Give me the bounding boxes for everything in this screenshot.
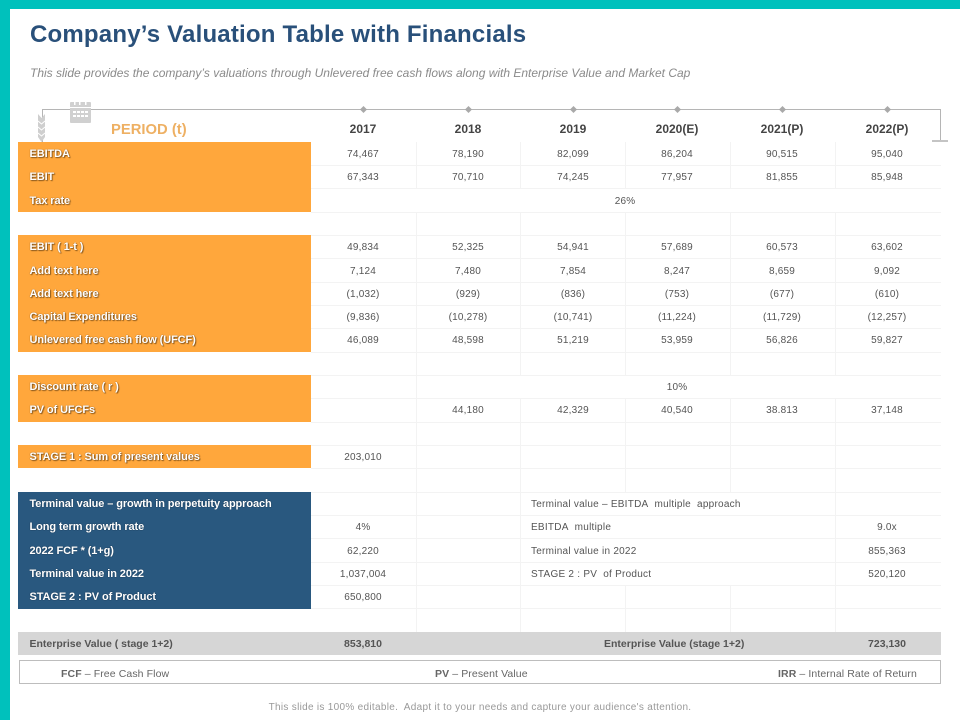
row: EBIT: 81,855: [766, 172, 798, 183]
period label: PERIOD (t): [111, 122, 187, 138]
row: PV of UFCFs: PV of UFCFs: [30, 404, 95, 416]
row: add text 2: [18, 282, 899, 305]
row: EBIT (1-t): 54,941: [557, 242, 589, 253]
year columns: 2022(P): [866, 122, 908, 136]
title: Company’s Valuation Table with Financials: [30, 21, 526, 48]
row: terminal value headings: Terminal value – EBITDA multiple approach: [531, 499, 741, 510]
row: PV of UFCFs: 37,148: [871, 405, 903, 416]
row: discount rate: Discount rate ( r ): [30, 381, 119, 393]
year columns: 2017: [350, 122, 376, 136]
row: discount rate: 10%: [667, 382, 687, 393]
row: long term growth rate: [18, 515, 897, 539]
legend: PV: PV – Present Value: [435, 668, 528, 680]
row: tax rate: 26%: [615, 196, 635, 207]
legend: IRR: IRR – Internal Rate of Return: [778, 668, 917, 680]
row: EBIT (1-t): 57,689: [661, 242, 693, 253]
row: add text 1: 7,480: [455, 266, 481, 276]
row: terminal value headings: Terminal value – growth in perpetuity approach: [30, 498, 272, 510]
row: stage 1: 203,010: [344, 452, 382, 463]
row: 2022 FCF: 2022 FCF * (1+g): [30, 545, 114, 557]
row: add text 1: 8,659: [769, 266, 795, 276]
row: PV of UFCFs: 38.813: [766, 405, 798, 416]
row: EBIT: 67,343: [347, 172, 379, 183]
row: terminal value in 2022: 520,120: [868, 569, 906, 580]
row: EBIT (1-t): EBIT ( 1-t ): [30, 241, 83, 253]
year columns: 2019: [560, 122, 586, 136]
row: long term growth rate: 9.0x: [877, 522, 897, 533]
row: EBITDA: 95,040: [871, 149, 903, 160]
row: add text 1: 7,124: [350, 266, 376, 276]
row: terminal value headings: [18, 492, 741, 515]
enterprise value label right: Enterprise Value (stage 1+2): [604, 638, 744, 650]
teal frame: left bar: [0, 0, 10, 720]
year columns: 2020(E): [656, 122, 698, 136]
row: capital expenditures: (11,729): [763, 312, 801, 323]
row: EBIT: [18, 165, 903, 189]
row: 2022 FCF: 855,363: [868, 546, 906, 557]
year columns: 2021(P): [761, 122, 803, 136]
row: PV of UFCFs: 42,329: [557, 405, 589, 416]
row: EBIT: EBIT: [30, 171, 54, 183]
row: PV of UFCFs: 40,540: [661, 405, 693, 416]
enterprise value left number: 853,810: [344, 638, 382, 650]
row: enterprise value band: [18, 632, 941, 655]
table header: period and years: [111, 122, 908, 138]
row: add text 2: (610): [875, 289, 899, 300]
row: EBITDA: 90,515: [766, 149, 798, 160]
row: long term growth rate: EBITDA multiple: [531, 522, 611, 533]
enterprise value right number: 723,130: [868, 638, 906, 650]
row: UFCF: [18, 328, 903, 352]
row: capital expenditures: (12,257): [868, 312, 906, 323]
row: add text 2: Add text here: [30, 288, 98, 300]
legend: FCF: FCF – Free Cash Flow: [61, 668, 169, 680]
row: EBIT: 70,710: [452, 172, 484, 183]
row: EBITDA: 86,204: [661, 149, 693, 160]
row: add text 1: Add text here: [30, 264, 98, 276]
row: add text 1: 8,247: [664, 266, 690, 276]
year columns: [350, 122, 908, 136]
row: tax rate: [18, 189, 635, 212]
row: EBITDA: EBITDA: [30, 148, 70, 160]
row: terminal value in 2022: [18, 562, 906, 585]
row: UFCF: 48,598: [452, 335, 484, 346]
row: EBIT (1-t): 49,834: [347, 242, 379, 253]
row: capital expenditures: (9,836): [346, 312, 380, 323]
row: 2022 FCF: [18, 539, 906, 562]
enterprise value label left: Enterprise Value ( stage 1+2): [30, 638, 173, 650]
icon: wheat: [38, 114, 45, 142]
row: EBIT: 85,948: [871, 172, 903, 183]
subtitle: This slide provides the company’s valuations through Unlevered free cash flows along with Enterprise Value and Market Cap: [30, 66, 690, 80]
row: UFCF: 51,219: [557, 335, 589, 346]
year columns: 2018: [455, 122, 481, 136]
row: UFCF: Unlevered free cash flow (UFCF): [30, 334, 196, 346]
row: add text 1: 9,092: [874, 266, 900, 276]
row: stage 1: [18, 445, 382, 468]
row: capital expenditures: Capital Expenditures: [30, 311, 137, 323]
row: EBITDA: [18, 142, 903, 165]
row: EBITDA: 74,467: [347, 149, 379, 160]
row: capital expenditures: (10,278): [449, 312, 487, 323]
row: stage 2: [18, 585, 382, 609]
row: long term growth rate: Long term growth rate: [30, 521, 144, 533]
row: PV of UFCFs: [18, 398, 903, 422]
row: EBIT (1-t): 63,602: [871, 242, 903, 253]
row: capital expenditures: [18, 305, 906, 328]
icon: calendar: [70, 102, 91, 123]
row: add text 2: (677): [770, 289, 794, 300]
row: stage 1: STAGE 1 : Sum of present values: [30, 451, 200, 463]
row: EBIT (1-t): 60,573: [766, 242, 798, 253]
row: stage 2: STAGE 2 : PV of Product: [30, 591, 156, 603]
row: EBITDA: 82,099: [557, 149, 589, 160]
row: add text 1: [18, 259, 900, 282]
row: EBITDA: 78,190: [452, 149, 484, 160]
row: UFCF: 56,826: [766, 335, 798, 346]
row: 2022 FCF: Terminal value in 2022: [531, 546, 637, 557]
row: add text 2: (1,032): [346, 289, 380, 300]
legend box: [19, 660, 941, 684]
row: stage 2: 650,800: [344, 592, 382, 603]
row: discount rate: [18, 375, 687, 398]
row: UFCF: 59,827: [871, 335, 903, 346]
row: add text 1: 7,854: [560, 266, 586, 276]
row: 2022 FCF: 62,220: [347, 546, 379, 557]
row: EBIT: 77,957: [661, 172, 693, 183]
row: capital expenditures: (10,741): [554, 312, 592, 323]
row: tax rate: Tax rate: [30, 195, 70, 207]
row: EBIT: 74,245: [557, 172, 589, 183]
row: capital expenditures: (11,224): [658, 312, 696, 323]
footer note: This slide is 100% editable. Adapt it to your needs and capture your audience's attention.: [269, 702, 691, 713]
row: add text 2: (929): [456, 289, 480, 300]
row: terminal value in 2022: STAGE 2 : PV of Product: [531, 569, 651, 580]
row: add text 2: (836): [561, 289, 585, 300]
teal frame: top bar: [0, 0, 960, 9]
row: UFCF: 46,089: [347, 335, 379, 346]
row: EBIT (1-t): [18, 235, 903, 259]
row: PV of UFCFs: 44,180: [452, 405, 484, 416]
row: UFCF: 53,959: [661, 335, 693, 346]
row: add text 2: (753): [665, 289, 689, 300]
row: long term growth rate: 4%: [356, 522, 370, 533]
row: EBIT (1-t): 52,325: [452, 242, 484, 253]
timeline bracket with markers: [42, 106, 948, 142]
row: terminal value in 2022: Terminal value in 2022: [30, 568, 144, 580]
row: terminal value in 2022: 1,037,004: [340, 569, 386, 580]
